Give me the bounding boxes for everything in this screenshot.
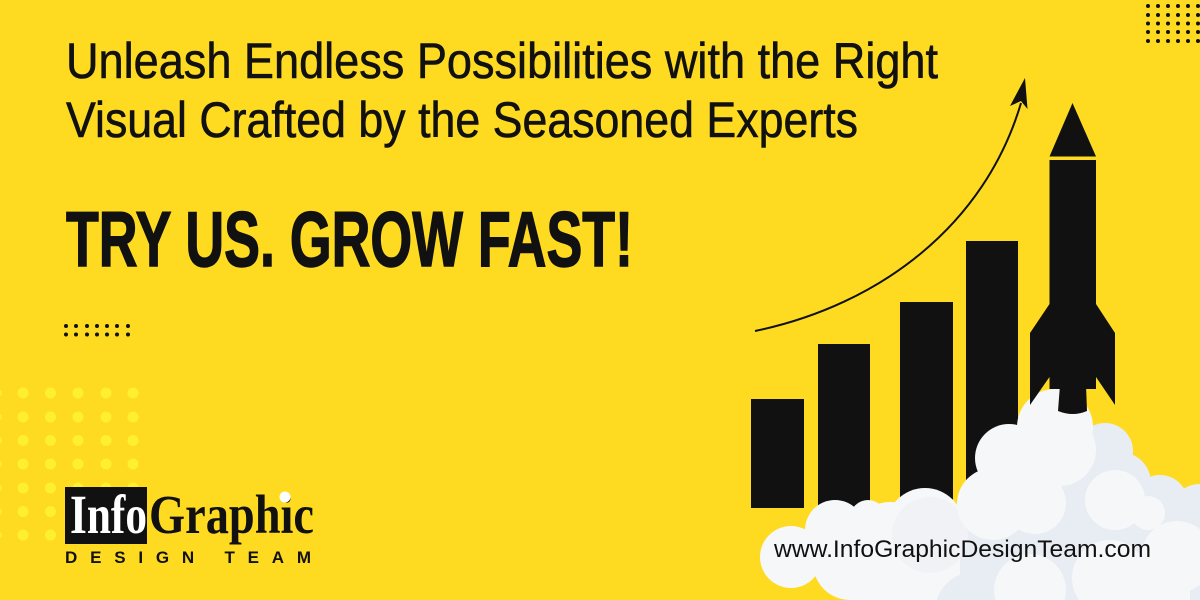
smoke cloud: shaded back layer (950, 423, 1200, 600)
logo: design team: DESIGN TEAM (65, 548, 311, 567)
rocket: nozzle (1058, 385, 1087, 414)
rocket (1030, 103, 1115, 414)
logo: Graphic: Graphic (149, 484, 314, 545)
logo: black box (65, 487, 147, 544)
smoke cloud: white front layer (760, 389, 1200, 600)
website url: www.InfoGraphicDesignTeam.com (773, 536, 1151, 563)
cloud: left puffs (760, 488, 964, 600)
cloud: faint inner shade (892, 497, 968, 573)
heading: tagline: Visual Crafted by the Seasoned Experts (66, 92, 858, 148)
small dot pattern: top right (1146, 4, 1200, 43)
growth arrow (755, 78, 1028, 331)
cloud: upper stack (957, 389, 1096, 600)
bar chart (751, 241, 1018, 524)
cloud: right puffs (1072, 470, 1200, 600)
heading: call to action: TRY US. GROW FAST! (66, 195, 633, 283)
heading: tagline: Unleash Endless Possibilities with the Right (66, 33, 938, 89)
logo: Info: Info (70, 484, 147, 545)
logo (65, 484, 314, 567)
rocket: nose cone (1050, 103, 1096, 156)
rocket: body and fins (1030, 160, 1115, 405)
small dot pattern: left (64, 324, 130, 336)
logo: white dot (280, 492, 290, 502)
cloud: lower shade (937, 572, 1013, 600)
heading: tagline (66, 33, 938, 148)
light dot pattern: bottom left (0, 388, 138, 540)
